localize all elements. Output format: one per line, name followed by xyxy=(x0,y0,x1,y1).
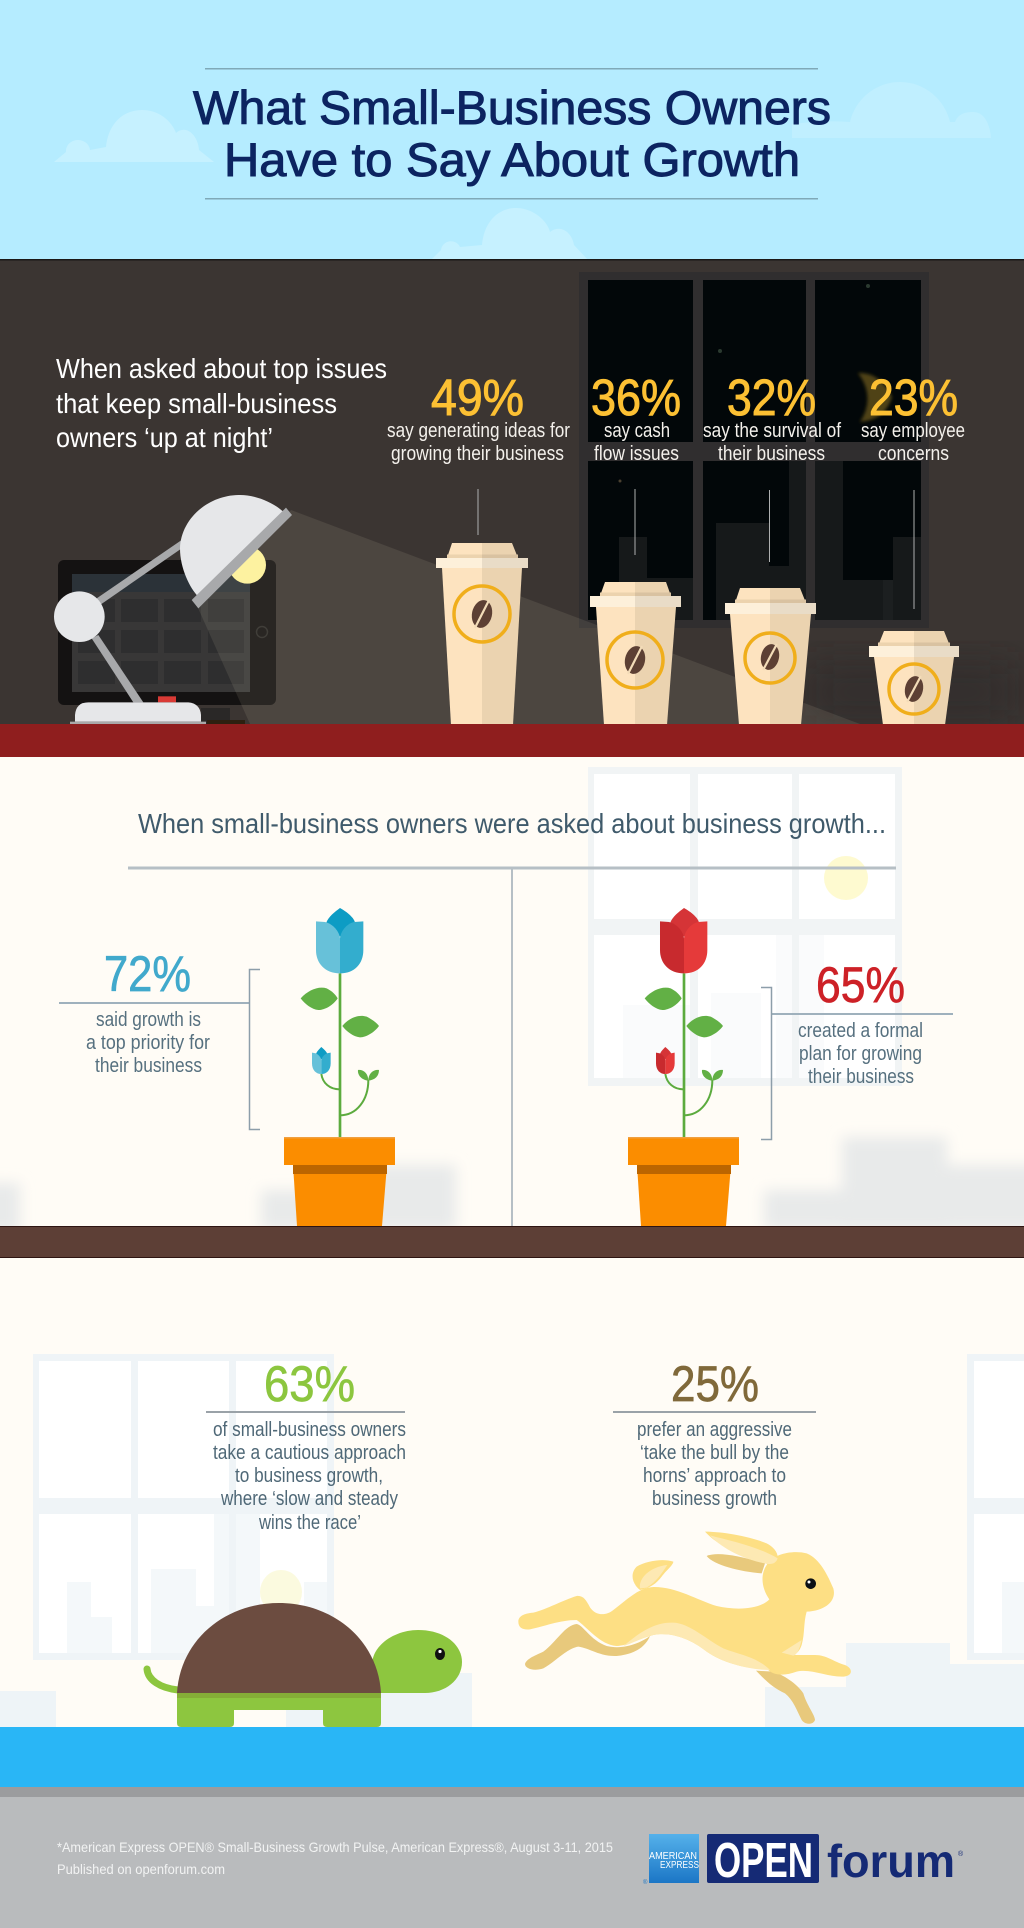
logo: American Express OPEN forum xyxy=(643,1834,964,1888)
stat: 65%: their business xyxy=(808,1066,914,1088)
panel: footer xyxy=(0,1787,1024,1928)
stat: 23% xyxy=(861,369,965,465)
stat: 49%: say generating ideas for xyxy=(387,420,570,442)
stat: 25%: business growth xyxy=(652,1488,777,1510)
pot left xyxy=(284,1137,395,1226)
ground bar xyxy=(0,1727,1024,1787)
stat: 65%: plan for growing xyxy=(799,1043,922,1065)
title: Have to Say About Growth xyxy=(224,133,800,186)
lamp light cone xyxy=(198,510,860,724)
logo: American Express OPEN forum: AMERICAN xyxy=(649,1851,697,1862)
title: What Small-Business Owners xyxy=(193,81,831,134)
icon: cloud bottom xyxy=(431,208,588,260)
stat: 49% xyxy=(387,369,570,465)
title rule bottom xyxy=(205,198,818,200)
logo: American Express OPEN forum: forum xyxy=(827,1835,955,1887)
shelf xyxy=(0,1226,1024,1258)
section heading: When small-business owners were asked about business growth... xyxy=(138,808,886,839)
stat: 36%: 36% xyxy=(591,369,681,426)
stat: 63%: where ‘slow and steady xyxy=(220,1488,398,1510)
source note: *American Express OPEN® Small-Business Growth Pulse, American Express®, August 3-11, 2015 xyxy=(57,1839,613,1855)
stat: 36%: flow issues xyxy=(594,443,679,465)
stat: 25% xyxy=(613,1356,816,1510)
coffee cup 36% xyxy=(590,582,681,725)
pot right xyxy=(628,1137,739,1226)
stat: 32%: say the survival of xyxy=(703,420,841,442)
icon: cloud right xyxy=(792,82,991,138)
logo: American Express OPEN forum: ® xyxy=(958,1850,964,1858)
intro text: When asked about top issues xyxy=(56,353,387,384)
logo: American Express OPEN forum: ® xyxy=(643,1879,648,1886)
coffee cup 32% xyxy=(725,588,816,725)
stat: 65%: 65% xyxy=(816,957,905,1013)
stat: 25%: horns’ approach to xyxy=(643,1465,786,1487)
stat: 72%: their business xyxy=(95,1055,202,1077)
stat: 32%: 32% xyxy=(727,369,816,426)
stat: 63%: take a cautious approach xyxy=(213,1442,406,1464)
plant: blue tulip xyxy=(301,908,379,1137)
leader lines xyxy=(478,489,914,609)
stat: 65%: created a formal xyxy=(798,1020,923,1042)
stat: 32%: their business xyxy=(718,443,825,465)
stat: 49%: growing their business xyxy=(391,443,564,465)
faint window xyxy=(588,767,902,1086)
plant: red tulip xyxy=(645,908,723,1137)
stat: 63%: to business growth, xyxy=(235,1465,383,1487)
desk xyxy=(0,724,1024,757)
panel: growth approach xyxy=(0,1258,1024,1727)
source note: Published on openforum.com xyxy=(57,1861,225,1877)
stat: 72%: said growth is xyxy=(96,1009,201,1031)
stat: 63% xyxy=(206,1356,406,1534)
panel: growth priorities xyxy=(0,757,1024,1233)
stat: 25%: 25% xyxy=(671,1356,759,1412)
stat: 63%: of small-business owners xyxy=(213,1419,406,1441)
faint windows and skyline xyxy=(0,1354,1024,1727)
intro text: owners ‘up at night’ xyxy=(56,422,273,453)
intro text xyxy=(56,353,387,453)
source note xyxy=(57,1839,613,1877)
stat: 72% xyxy=(59,946,260,1130)
title rule top xyxy=(205,68,818,70)
logo: American Express OPEN forum: OPEN xyxy=(714,1834,813,1888)
stat: 23%: 23% xyxy=(869,369,958,426)
stat: 25%: prefer an aggressive xyxy=(637,1419,792,1441)
title xyxy=(193,81,831,186)
coffee cup 49% xyxy=(436,543,528,725)
stat: 36%: say cash xyxy=(604,420,670,442)
logo: American Express OPEN forum: EXPRESS xyxy=(660,1860,699,1871)
intro text: that keep small-business xyxy=(56,388,337,419)
panel: sky header xyxy=(0,0,1024,260)
heading rule and divider xyxy=(128,866,896,1226)
icon: turtle xyxy=(147,1570,462,1727)
stat: 63%: 63% xyxy=(264,1356,355,1412)
tablet on desk xyxy=(58,560,276,724)
icon: rabbit xyxy=(518,1532,851,1724)
blurred skyline xyxy=(0,1137,1024,1233)
stat: 63%: wins the race’ xyxy=(258,1512,361,1534)
stat: 36% xyxy=(591,369,681,465)
stat: 32% xyxy=(703,369,841,465)
night window xyxy=(579,272,929,628)
panel: night office xyxy=(0,259,1024,725)
icon: cloud left xyxy=(54,110,214,162)
stat: 49%: 49% xyxy=(431,369,524,426)
stat: 72%: a top priority for xyxy=(86,1032,210,1054)
stat: 23%: concerns xyxy=(878,443,949,465)
stat: 25%: ‘take the bull by the xyxy=(640,1442,789,1464)
stat: 72%: 72% xyxy=(104,946,191,1002)
stat: 65% xyxy=(761,957,953,1140)
lamp xyxy=(54,495,292,725)
coffee cup 23% xyxy=(869,631,959,725)
stat: 23%: say employee xyxy=(861,420,965,442)
